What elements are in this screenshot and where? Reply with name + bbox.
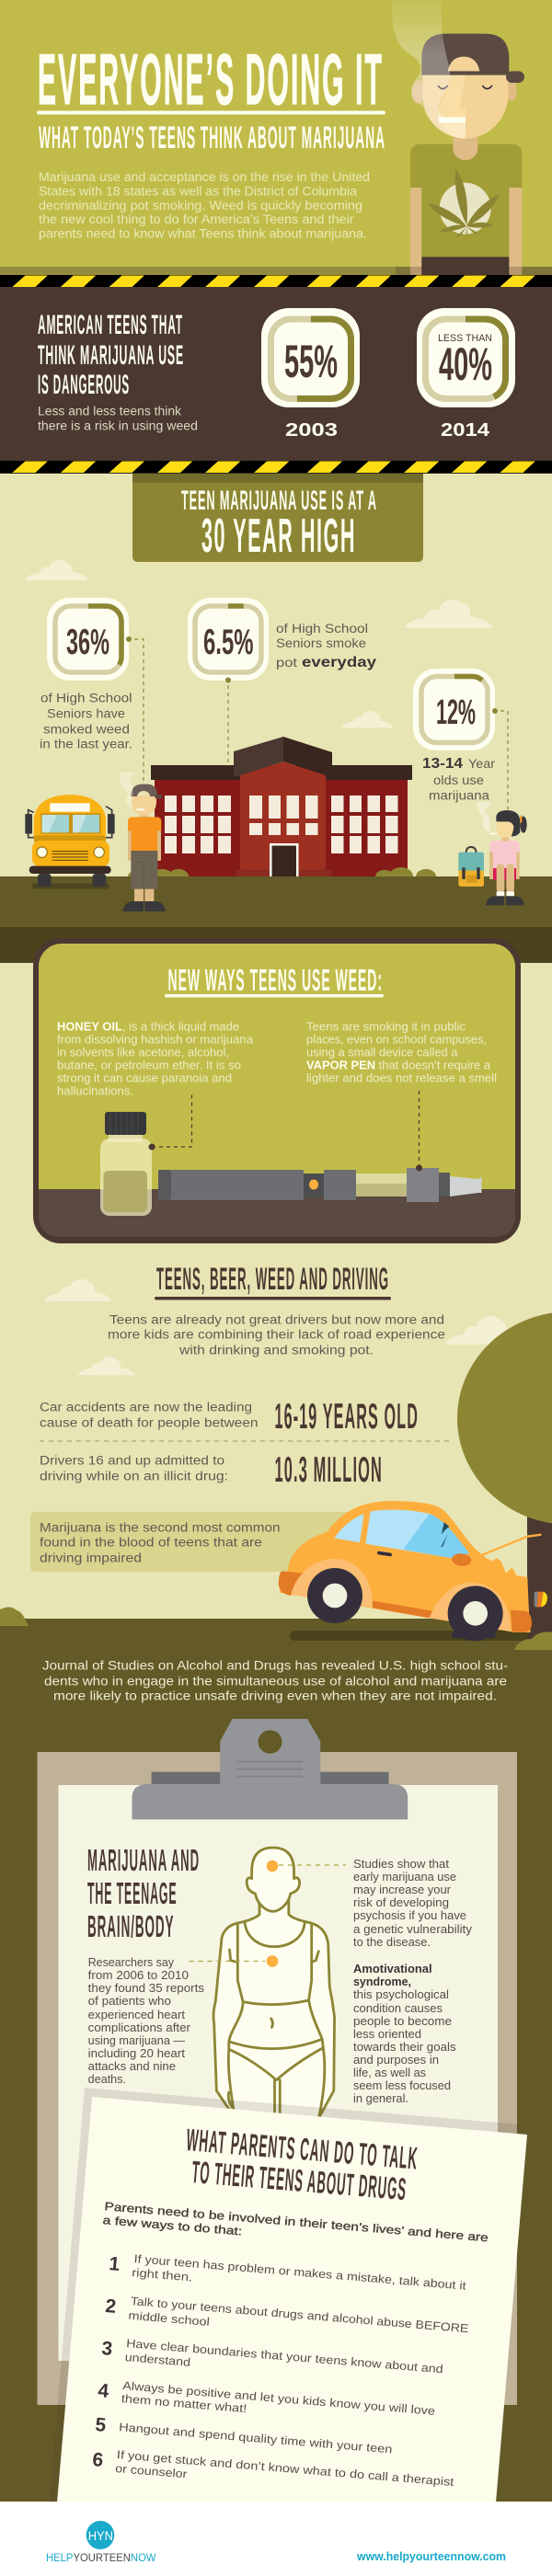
text: amotivational syndrome: life, as well as — [353, 2067, 426, 2079]
icon: school bus — [25, 795, 115, 889]
text: journal of studies — [42, 1659, 508, 1703]
text: amotivational syndrome: towards their goals — [353, 2041, 456, 2054]
stat: less than 40% in 2014: 40% — [439, 338, 492, 390]
text: journal of studies: more likely to practice unsafe driving even when they are not impaired. — [53, 1689, 497, 1703]
panel: header — [0, 0, 552, 275]
icon: vapor pen — [158, 1164, 482, 1202]
list item 4: Always be positive and let you kids know you will love — [122, 2379, 435, 2418]
banner: 30 year high — [132, 474, 423, 563]
text: psychosis — [353, 1858, 473, 1949]
text: amotivational syndrome: and purposes in — [353, 2054, 439, 2067]
illustration: school building — [151, 737, 412, 876]
text: heart complications: experienced heart — [88, 2009, 186, 2021]
icon: backpack and girl smoking — [458, 802, 527, 905]
text: heart complications: of patients who — [88, 1995, 171, 2008]
text: vapor pen: lighter and does not release a smell — [306, 1072, 497, 1085]
text: psychosis: may increase your — [353, 1883, 451, 1896]
text: psychosis: early marijuana use — [353, 1871, 456, 1883]
text: driving intro — [108, 1313, 445, 1357]
text: heart complications: deaths. — [88, 2073, 126, 2086]
panel: what parents can do — [57, 2097, 527, 2502]
callout lines — [134, 639, 508, 809]
marker: head — [267, 1860, 278, 1872]
panel: clipboard: MARIJUANA AND — [87, 1843, 200, 1877]
text: heart complications: Researchers say — [88, 1956, 175, 1969]
text: driving intro: with drinking and smoking pot. — [178, 1343, 374, 1357]
stat: 12% — [413, 669, 498, 750]
text: heart complications: using marijuana — — [88, 2034, 186, 2047]
text: amotivational syndrome: people to become — [353, 2015, 452, 2028]
panel: teens who think marijuana is dangerous: THINK MARIJUANA USE — [38, 340, 184, 371]
intro text: Marijuana use and acceptance is on the rise in the United — [39, 170, 370, 184]
website url: www.helpyourteennow.com — [356, 2549, 506, 2563]
stat: 10.3 million: Drivers 16 and up admitted to — [40, 1453, 224, 1468]
stat: less than 40% in 2014: 2014 — [441, 419, 490, 441]
cloud — [25, 560, 88, 580]
stat: 10.3 million — [40, 1450, 383, 1490]
stat: 55% in 2003: 2003 — [285, 419, 338, 441]
text: heart complications: complications after — [88, 2021, 190, 2034]
text: honey oil: strong it can cause paranoia and — [57, 1072, 232, 1085]
logo: HELPYOURTEENNOW — [46, 2552, 156, 2564]
dashed leaders — [190, 1865, 346, 1961]
text: heart complications: including 20 heart — [88, 2047, 186, 2060]
text: 6.5% caption: of High School — [276, 622, 368, 635]
text: amotivational syndrome: condition causes — [353, 2002, 443, 2015]
bush — [514, 1631, 552, 1650]
text: 36% caption: smoked weed — [43, 723, 130, 736]
text: driving intro: Teens are already not great drivers but now more and — [109, 1313, 444, 1326]
stat: 10.3 million: driving while on an illicit drug: — [40, 1470, 228, 1483]
text: vapor pen — [306, 1021, 497, 1085]
intro: Parents need to be involved in their teen’s lives’ and here are — [104, 2200, 489, 2244]
callout: second most common: driving impaired — [40, 1551, 142, 1565]
list item 3: understand — [124, 2351, 191, 2369]
text: honey oil: hallucinations. — [57, 1085, 133, 1098]
intro — [102, 2200, 489, 2244]
subtext — [38, 405, 198, 432]
text: 36% caption: Seniors have — [47, 706, 125, 721]
text: honey oil: butane, or petroleum ether. It is so — [57, 1059, 241, 1072]
list item 1: 1 — [109, 2253, 121, 2275]
list item 2: Talk to your teens about drugs and alcohol abuse BEFORE — [130, 2295, 469, 2335]
text: journal of studies: Journal of Studies on Alcohol and Drugs has revealed U.S. high school stu- — [42, 1659, 508, 1672]
icon: honey oil bottle — [100, 1112, 155, 1216]
text: honey oil: in solvents like acetone, alcohol, — [57, 1047, 229, 1059]
text: honey oil: HONEY OIL, is a thick liquid made — [57, 1021, 239, 1034]
text: 6.5% caption: Seniors smoke — [276, 636, 366, 650]
text: psychosis: Studies show that — [353, 1858, 450, 1871]
text: heart complications: from 2006 to 2010 — [88, 1969, 189, 1982]
cloud — [341, 711, 394, 727]
marker: heart — [267, 1955, 278, 1967]
ground — [0, 876, 552, 927]
heading: brain and body — [87, 1843, 200, 1943]
cloud — [44, 1279, 112, 1301]
car shadow — [290, 1631, 528, 1641]
text: 12% caption: marijuana — [429, 789, 490, 802]
stat: 55% in 2003 — [261, 308, 360, 441]
list item 6: 6 — [92, 2449, 104, 2471]
heading: teens, beer, weed and driving — [155, 1262, 391, 1300]
list item 3: Have clear boundaries that your teens know about and — [126, 2337, 443, 2376]
text: vapor pen: places, even on school campuses, — [306, 1034, 487, 1047]
panel: clipboard: THE TEENAGE — [87, 1876, 177, 1910]
list item 2: middle school — [128, 2309, 210, 2329]
stat: 16-19 years old: cause of death for people between — [40, 1416, 258, 1429]
ground — [0, 1619, 552, 2502]
callout lines — [152, 1091, 420, 1168]
text: 6.5% caption — [276, 622, 376, 670]
list item 3: 3 — [101, 2338, 113, 2360]
text: vapor pen: Teens are smoking it in public — [306, 1021, 466, 1034]
text: 12% caption — [422, 756, 496, 802]
heading: IS DANGEROUS — [38, 370, 130, 400]
icon: boy smoking — [120, 773, 166, 911]
hazard stripe: bottom — [0, 461, 552, 474]
text: 36% caption: of High School — [40, 692, 132, 704]
text: amotivational syndrome: seem less focused — [353, 2079, 451, 2092]
hazard stripe: top — [0, 275, 552, 287]
text: honey oil: from dissolving hashish or marijuana — [57, 1034, 253, 1047]
panel: teens who think marijuana is dangerous: AMERICAN TEENS THAT — [38, 310, 183, 340]
text: vapor pen: using a small device called a — [306, 1047, 458, 1059]
icon: crashed car — [279, 1501, 547, 1641]
text: 12% caption: 13-14 — [422, 756, 463, 772]
subtext: there is a risk in using weed — [38, 419, 198, 432]
callout: second most common — [30, 1512, 362, 1572]
text: amotivational syndrome: in general. — [353, 2092, 408, 2105]
text: vapor pen: VAPOR PEN that doesn’t require a — [306, 1059, 490, 1072]
heading — [185, 2123, 420, 2207]
cloud — [405, 600, 493, 628]
paper shadow — [50, 2088, 519, 2502]
icon: clip — [132, 1719, 408, 1819]
text: journal of studies: dents who in engage in the simultaneous use of alcohol and marijuana are — [44, 1674, 507, 1689]
text: 12% caption: olds use — [433, 773, 484, 787]
icon: body outline — [213, 1848, 335, 2118]
bush — [0, 1607, 29, 1626]
callout: second most common: Marijuana is the second most common — [40, 1521, 280, 1534]
stat: 12%: 12% — [436, 693, 476, 732]
text: psychosis: risk of developing — [353, 1896, 449, 1909]
stat: 16-19 years old: Car accidents are now the leading — [40, 1400, 252, 1414]
heading: brain and body: BRAIN/BODY — [87, 1909, 174, 1943]
list item 5: Hangout and spend quality time with your teen — [119, 2421, 393, 2456]
text: 36% caption: in the last year. — [40, 738, 132, 750]
list item 4: them no matter what! — [121, 2392, 247, 2415]
text: heart complications — [88, 1956, 204, 2086]
tree — [457, 1311, 552, 1646]
list item 2: 2 — [105, 2296, 117, 2318]
text: honey oil — [57, 1021, 253, 1098]
panel: new ways teens use weed — [33, 938, 521, 1243]
list item 4: 4 — [98, 2380, 109, 2402]
text: psychosis: a genetic vulnerability — [353, 1923, 473, 1936]
text: driving intro: more kids are combining their lack of road experience — [108, 1328, 445, 1341]
stat: less than 40% in 2014 — [417, 308, 515, 441]
list item 1: If your teen has problem or makes a mistake, talk about it — [133, 2252, 467, 2293]
heading — [38, 310, 184, 400]
stat: 6.5% — [188, 598, 269, 682]
text: amotivational syndrome: less oriented — [353, 2028, 421, 2041]
bushes — [128, 867, 436, 886]
cloud — [78, 1357, 135, 1375]
list item 5 — [95, 2414, 393, 2456]
stat: 6.5%: 6.5% — [203, 623, 254, 662]
stat: 36%: 36% — [66, 623, 109, 662]
tree trunk base — [527, 1614, 552, 1642]
text: heart complications: attacks and nine — [88, 2060, 176, 2073]
list item 6: or counselor — [115, 2462, 188, 2480]
windows — [165, 796, 397, 853]
intro text: parents need to know what Teens think about marijuana. — [39, 226, 367, 241]
intro text: States with 18 states as well as the District of Columbia — [39, 184, 358, 199]
text: 6.5% caption: pot — [276, 656, 297, 670]
panel: clipboard — [37, 1719, 517, 2405]
footer — [0, 2502, 552, 2576]
list item 5: 5 — [95, 2414, 107, 2436]
callout: second most common: found in the blood of teens that are — [40, 1536, 262, 1549]
stat: less than 40% in 2014: LESS THAN — [438, 333, 492, 344]
text: 10.3 MILLION — [274, 1450, 383, 1490]
stat: 55% in 2003: 55% — [284, 336, 338, 387]
stat: 36% — [47, 598, 132, 681]
text: 6.5% caption: everyday — [302, 655, 376, 670]
text: amotivational syndrome: syndrome, — [353, 1975, 411, 1988]
text: heart complications: they found 35 reports — [88, 1982, 204, 1995]
text: amotivational syndrome: this psychological — [353, 1988, 449, 2001]
stat: 16-19 years old — [40, 1397, 419, 1437]
intro text: the new cool thing to do for America’s Teens and their — [39, 212, 354, 226]
intro text: decriminalizing pot smoking. Weed is quickly becoming — [39, 199, 362, 212]
subtext: Less and less teens think — [38, 405, 181, 418]
intro text — [39, 170, 370, 241]
text: 12% caption: Year — [468, 757, 496, 771]
intro: a few ways to do that: — [102, 2214, 243, 2238]
text: amotivational syndrome — [353, 1963, 456, 2105]
text: psychosis: to the disease. — [353, 1936, 431, 1949]
text: psychosis: psychosis if you have — [353, 1909, 466, 1922]
logo: HYN — [88, 2529, 113, 2543]
text: amotivational syndrome: Amotivational — [353, 1963, 432, 1975]
text: 36% caption — [40, 692, 132, 750]
cloud — [445, 1316, 528, 1345]
logo — [46, 2521, 156, 2564]
icon: smoking teen — [392, 0, 552, 275]
list item 6: If you get stuck and don’t know what to do call a therapist — [116, 2448, 454, 2489]
list item 1: right then. — [132, 2266, 193, 2284]
panel: teens who think marijuana is dangerous — [0, 287, 552, 461]
